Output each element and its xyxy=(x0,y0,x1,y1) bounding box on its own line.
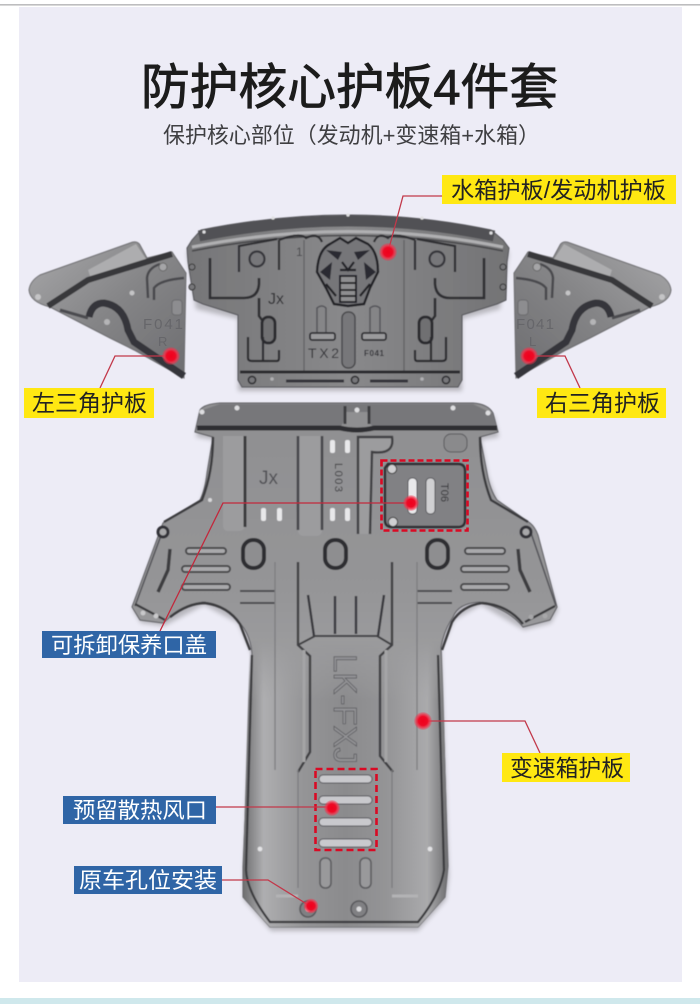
callout: right triangle guard xyxy=(520,347,666,418)
panel: left triangle guard: R xyxy=(158,334,167,349)
callout: reserved heat vent: 预留散热风口 xyxy=(73,798,207,823)
callout: original mounting holes xyxy=(74,866,318,914)
callout: transmission guard xyxy=(414,712,630,782)
white slots xyxy=(261,440,350,521)
guard pressed ribs xyxy=(239,235,455,272)
panel: transmission guard xyxy=(132,403,558,931)
long ribs xyxy=(223,436,245,531)
guard tiger emblem xyxy=(317,238,378,306)
guard bottom band xyxy=(240,370,460,374)
edge contours xyxy=(164,437,528,522)
right triangle stamped text: F041 xyxy=(516,316,554,333)
three mounting bumps xyxy=(243,540,264,568)
callout: left triangle guard xyxy=(24,347,180,418)
panel: right triangle guard: L xyxy=(529,334,536,349)
guard centre stampings xyxy=(342,312,355,368)
callout: removable service cover xyxy=(42,495,419,658)
flange xyxy=(197,404,497,428)
stamped LK-FXJ: LK-FXJ xyxy=(327,654,363,764)
panel: radiator and engine guard xyxy=(187,0,509,391)
panel: left triangle guard xyxy=(29,242,186,378)
central fins xyxy=(308,595,384,636)
callout: radiator and engine guard xyxy=(379,175,676,261)
vent ribs xyxy=(182,548,509,590)
callout: radiator and engine guard: 水箱护板/发动机护板 xyxy=(451,177,666,203)
dashed highlight: heat vents xyxy=(316,769,376,850)
heat vent slots xyxy=(319,775,372,847)
bottom teal strip xyxy=(0,998,700,1004)
panel: radiator and engine guard: Jx xyxy=(268,291,284,308)
top grey rule xyxy=(0,4,700,6)
left triangle stamped text: F041 xyxy=(143,316,183,333)
title: 防护核心护板4件套 xyxy=(141,61,558,115)
removable service cover: T06 xyxy=(438,483,450,502)
panel: radiator and engine guard: 1 xyxy=(296,245,303,259)
tail small ribs and holes xyxy=(320,858,331,888)
tail shading xyxy=(243,640,448,927)
callout: reserved heat vent xyxy=(63,796,340,824)
stamped marks: Jx xyxy=(259,468,278,489)
callout: right triangle guard: 右三角护板 xyxy=(545,390,660,416)
callout: original mounting holes: 原车孔位安装 xyxy=(79,868,217,893)
panel: radiator and engine guard: F041 xyxy=(364,349,385,358)
panel: transmission guard: L003 xyxy=(332,463,344,493)
callout: removable service cover: 可拆卸保养口盖 xyxy=(51,633,207,658)
subtitle: 保护核心部位（发动机+变速箱+水箱） xyxy=(163,123,540,148)
callout: left triangle guard: 左三角护板 xyxy=(32,390,147,416)
removable service cover xyxy=(385,464,465,527)
dashed highlight: service cover xyxy=(382,460,468,530)
guard stamped text: TX2 xyxy=(308,345,339,361)
callout: transmission guard: 变速箱护板 xyxy=(510,755,624,781)
guard body xyxy=(187,215,509,387)
guard body xyxy=(132,403,557,927)
panel: right triangle guard xyxy=(514,242,671,378)
central channels xyxy=(298,562,393,772)
